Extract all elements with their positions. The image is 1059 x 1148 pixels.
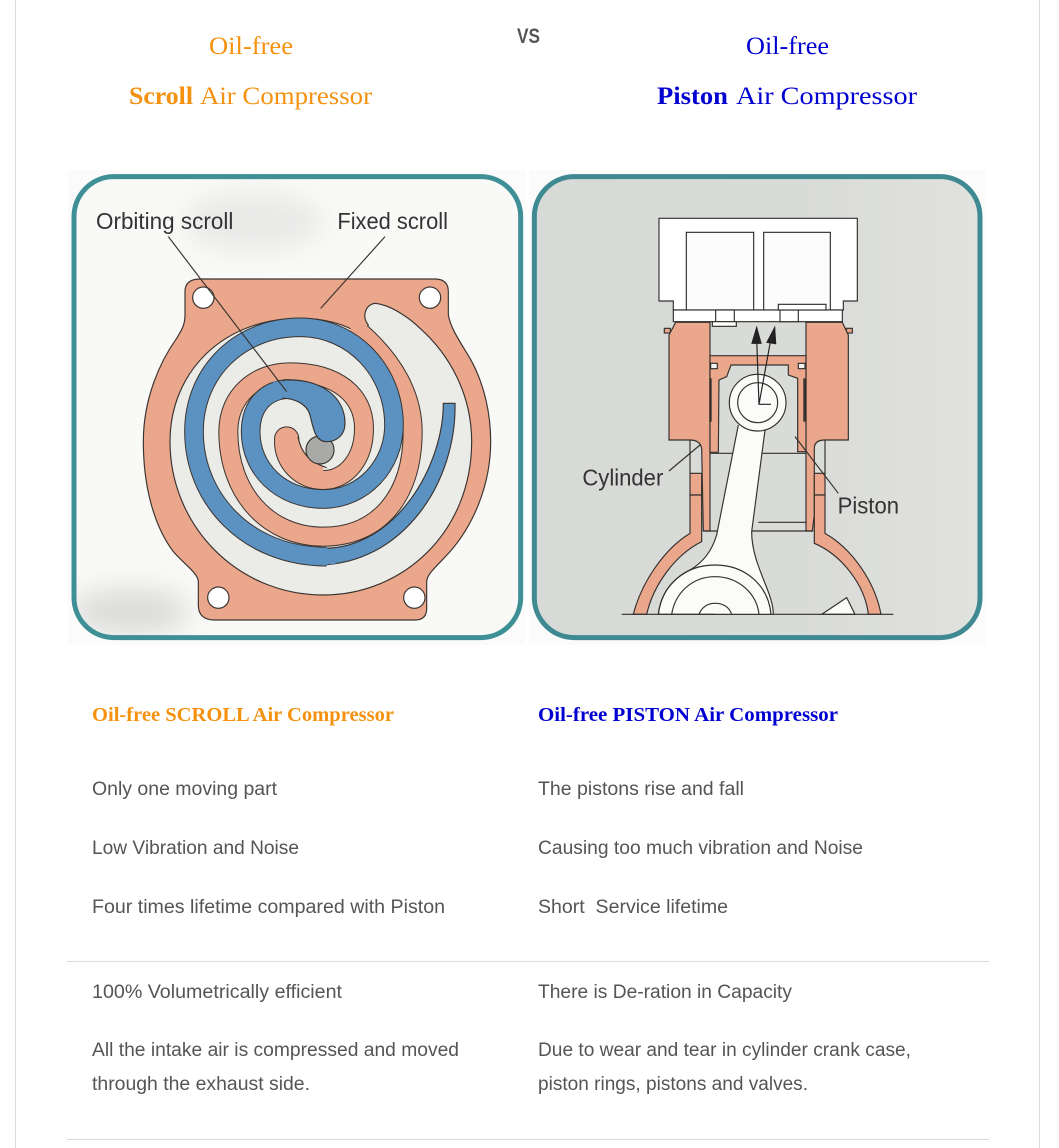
connecting rod (690, 425, 773, 614)
title: oil-free piston air compressor (657, 33, 918, 110)
heading: piston column: Oil-free PISTON Air Compressor (538, 704, 838, 726)
text: pistons motion: The pistons rise and fall (538, 779, 744, 800)
column: scroll features (92, 704, 459, 1095)
label: orbiting scroll: Orbiting scroll (96, 208, 233, 234)
text: wear and tear: Due to wear and tear in cylinder crank case, (538, 1040, 911, 1061)
crank arcs (658, 565, 771, 614)
fixed scroll wrap (228, 326, 413, 537)
cylinder tabs (664, 328, 852, 333)
orbiting scroll (194, 327, 455, 565)
title: oil-free scroll air compressor: Oil-free (209, 33, 293, 60)
column: piston features (538, 704, 911, 1095)
title: oil-free scroll air compressor: Air Compressor (200, 83, 373, 110)
label: fixed scroll: Fixed scroll (337, 208, 448, 234)
cylinder slits (709, 378, 806, 422)
panel: piston compressor diagram (529, 170, 986, 645)
panel: scroll compressor diagram (68, 170, 525, 645)
copper base plate (143, 279, 491, 620)
rod edges (690, 425, 773, 614)
text: wear and tear (538, 1040, 911, 1095)
text: vibration: Low Vibration and Noise (92, 838, 299, 859)
crank (658, 565, 855, 614)
title: oil-free piston air compressor: Air Compressor (736, 83, 918, 110)
heading: scroll column: Oil-free SCROLL Air Compressor (92, 704, 394, 726)
text: efficiency: 100% Volumetrically efficient (92, 982, 343, 1003)
grey shaft (306, 436, 334, 464)
label: piston: Piston (838, 492, 899, 518)
wrist pin (729, 374, 786, 431)
base line (622, 613, 893, 616)
text: lifetime: Short Service lifetime (538, 897, 728, 918)
text: moving part: Only one moving part (92, 779, 278, 800)
leader lines (669, 437, 838, 493)
text: lifetime: Four times lifetime compared with Piston (92, 897, 445, 918)
title: oil-free piston air compressor: Oil-free (746, 33, 829, 60)
cylinder walls (633, 322, 881, 614)
label: cylinder: Cylinder (582, 465, 664, 491)
title: oil-free scroll air compressor (129, 33, 373, 110)
versus label: VS (517, 25, 540, 48)
arrows (752, 328, 776, 404)
text: wear and tear: piston rings, pistons and valves. (538, 1074, 808, 1095)
piston (710, 356, 806, 452)
text: intake air (92, 1040, 459, 1095)
text: intake air: All the intake air is compressed and moved (92, 1040, 459, 1061)
text: vibration: Causing too much vibration and Noise (538, 838, 863, 859)
text: intake air: through the exhaust side. (92, 1074, 310, 1095)
leader lines (168, 237, 385, 392)
text: capacity: There is De-ration in Capacity (538, 982, 793, 1003)
air channel (170, 303, 472, 595)
mounting holes (193, 287, 441, 608)
cylinder head (659, 218, 857, 326)
title: oil-free scroll air compressor: Scroll (129, 83, 193, 110)
title: oil-free piston air compressor: Piston (657, 83, 728, 110)
